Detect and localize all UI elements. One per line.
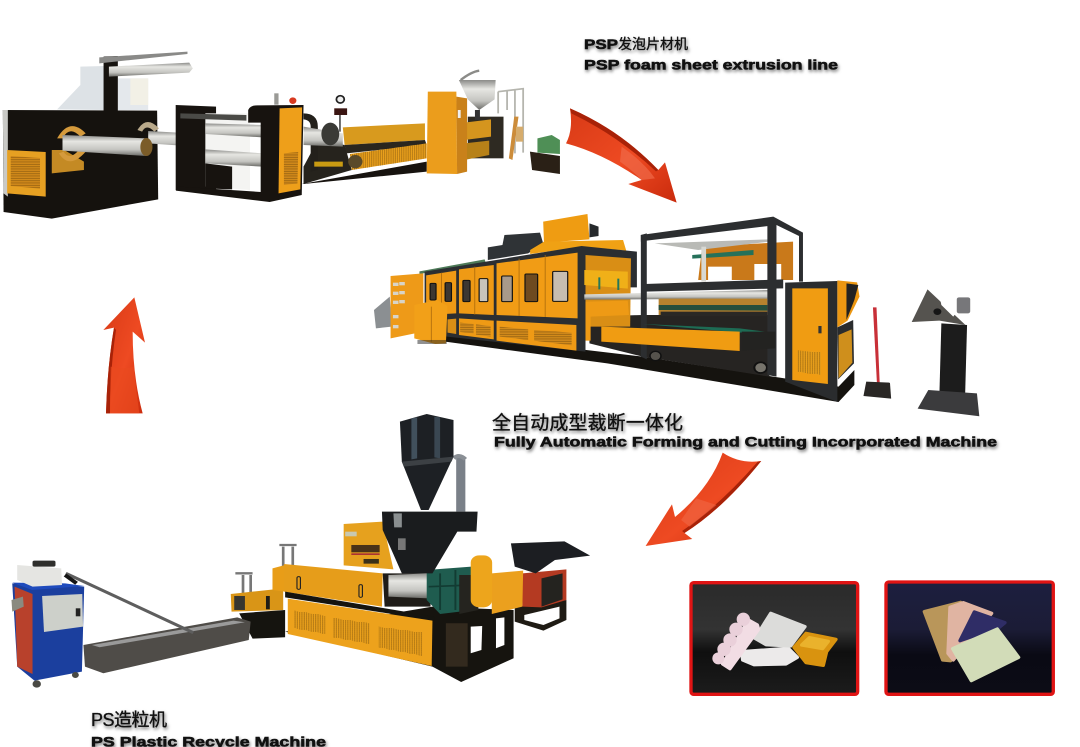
arrow: forming machine to products [646,453,761,546]
second frame with rollers [176,93,304,202]
heading: PS plastic recycle machine [91,710,326,747]
winder top section [57,52,193,112]
main orange housing [284,564,434,666]
machine: PSP foam sheet extrusion line [3,52,560,219]
heading: forming and cutting machine: Fully Automatic Forming and Cutting Incorporated Machine [494,434,997,450]
heading: forming and cutting machine [492,412,997,450]
heading: PSP foam sheet extrusion line: PSP 发泡片材机 [584,36,688,52]
product photo: coloured foam trays [886,582,1053,694]
arrow: recycling back to extrusion line [103,297,145,413]
right control cabinet [785,280,860,402]
blue pelletizer cabinet [11,561,84,688]
heading: forming and cutting machine: 全自动成型裁断一体化 [492,412,683,434]
heading: PS plastic recycle machine: PS造粒机 [91,710,167,730]
door windows [430,271,568,302]
heading: PSP foam sheet extrusion line: PSP foam sheet extrusion line [584,56,838,72]
arrow: extrusion line to forming machine [566,108,677,203]
heading: PSP foam sheet extrusion line [584,36,838,72]
unwinding stand [912,289,979,416]
stacking frame [641,217,803,377]
black winder cabinet [3,110,159,219]
black base [285,607,514,682]
lower hopper and cyclone [382,414,478,573]
pelletizer feeding frame [231,545,297,639]
product photo: white foam containers [691,583,858,694]
hydraulic unit [530,135,560,174]
conveyor and water tank [65,573,251,673]
orange cabinet and feed hopper [427,71,523,174]
oven body with doors [425,246,637,352]
forming station [584,255,769,341]
crusher [511,541,590,631]
black machine base [445,315,854,402]
machine: PS plastic recycle machine [11,414,590,688]
red rod accessory [863,307,891,399]
output tray [601,324,775,351]
material infeed [374,297,392,328]
extruder barrel [302,96,427,184]
control panel [344,522,393,569]
extruder screw and gearbox [383,555,523,614]
top hydraulic unit [419,214,626,274]
foreground rollers [62,131,226,156]
machine: fully automatic forming and cutting machine [374,214,979,416]
control cabinets [391,273,447,344]
